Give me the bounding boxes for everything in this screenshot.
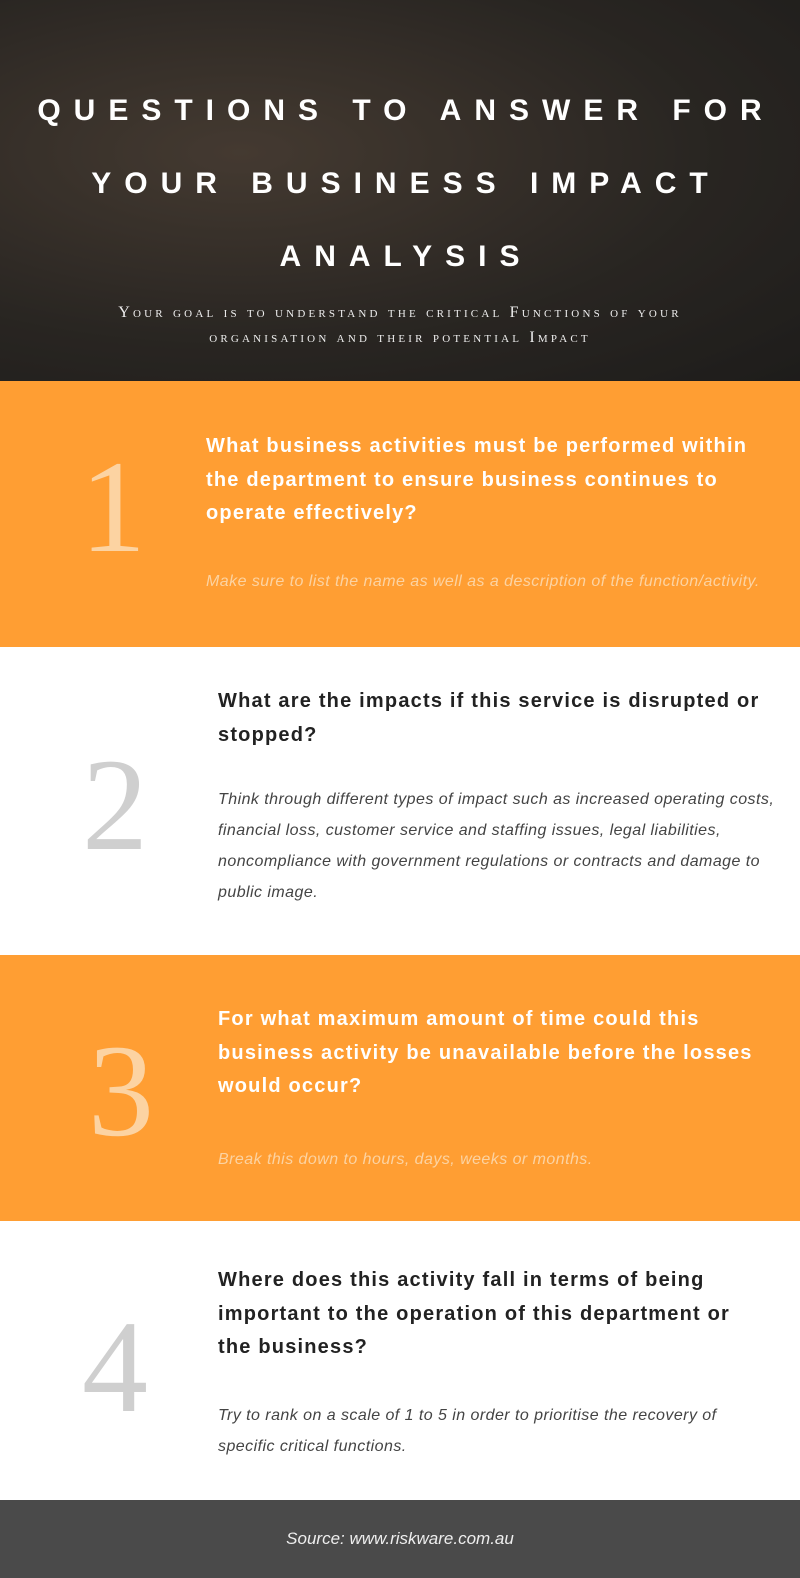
note 3: Break this down to hours, days, weeks or months.: [218, 1151, 593, 1168]
question text 4: important to the operation of this department or: [218, 1302, 730, 1324]
panel: question 1: [0, 381, 800, 647]
note 2: [218, 791, 774, 901]
question text 2: What are the impacts if this service is disrupted or: [218, 690, 759, 712]
note 2: public image.: [218, 884, 318, 901]
panel: question 3: [0, 955, 800, 1221]
question text 3: would occur?: [218, 1075, 362, 1097]
question text 2: [218, 690, 759, 746]
question text 3: For what maximum amount of time could this: [218, 1008, 700, 1030]
question text 1: [206, 435, 747, 524]
question text 1: operate effectively?: [206, 502, 418, 524]
note 4: specific critical functions.: [218, 1438, 407, 1455]
note 2: financial loss, customer service and staffing issues, legal liabilities,: [218, 822, 721, 839]
number 4: 4: [82, 1293, 148, 1440]
number 1: 1: [80, 433, 146, 580]
note 2: Think through different types of impact such as increased operating costs,: [218, 791, 774, 808]
title: ANALYSIS: [280, 240, 532, 273]
note 2: noncompliance with government regulations or contracts and damage to: [218, 853, 760, 870]
footer: [0, 1500, 800, 1578]
question text 3: business activity be unavailable before the losses: [218, 1042, 753, 1064]
panel: question 4: [0, 1221, 800, 1500]
title: YOUR BUSINESS IMPACT: [91, 167, 721, 200]
question text 3: [218, 1008, 753, 1097]
note 4: [218, 1407, 718, 1455]
question text 1: the department to ensure business continues to: [206, 468, 718, 490]
number 2: 2: [82, 731, 148, 878]
question text 1: What business activities must be performed within: [206, 435, 747, 457]
panel: question 2: [0, 647, 800, 955]
title: QUESTIONS TO ANSWER FOR: [37, 94, 775, 127]
header panel: [0, 0, 800, 381]
note 1: Make sure to list the name as well as a description of the function/activity.: [206, 573, 760, 590]
question text 4: [218, 1269, 730, 1358]
question text 4: the business?: [218, 1336, 368, 1358]
subtitle: organisation and their potential Impact: [209, 329, 591, 346]
subtitle: [118, 304, 682, 346]
subtitle: Your goal is to understand the critical Functions of your: [118, 304, 682, 321]
note 4: Try to rank on a scale of 1 to 5 in order to prioritise the recovery of: [218, 1407, 717, 1424]
title: [37, 94, 775, 273]
question text 4: Where does this activity fall in terms of being: [218, 1269, 704, 1291]
footer: Source: www.riskware.com.au: [286, 1529, 514, 1548]
question text 2: stopped?: [218, 724, 318, 746]
number 3: 3: [88, 1017, 154, 1164]
